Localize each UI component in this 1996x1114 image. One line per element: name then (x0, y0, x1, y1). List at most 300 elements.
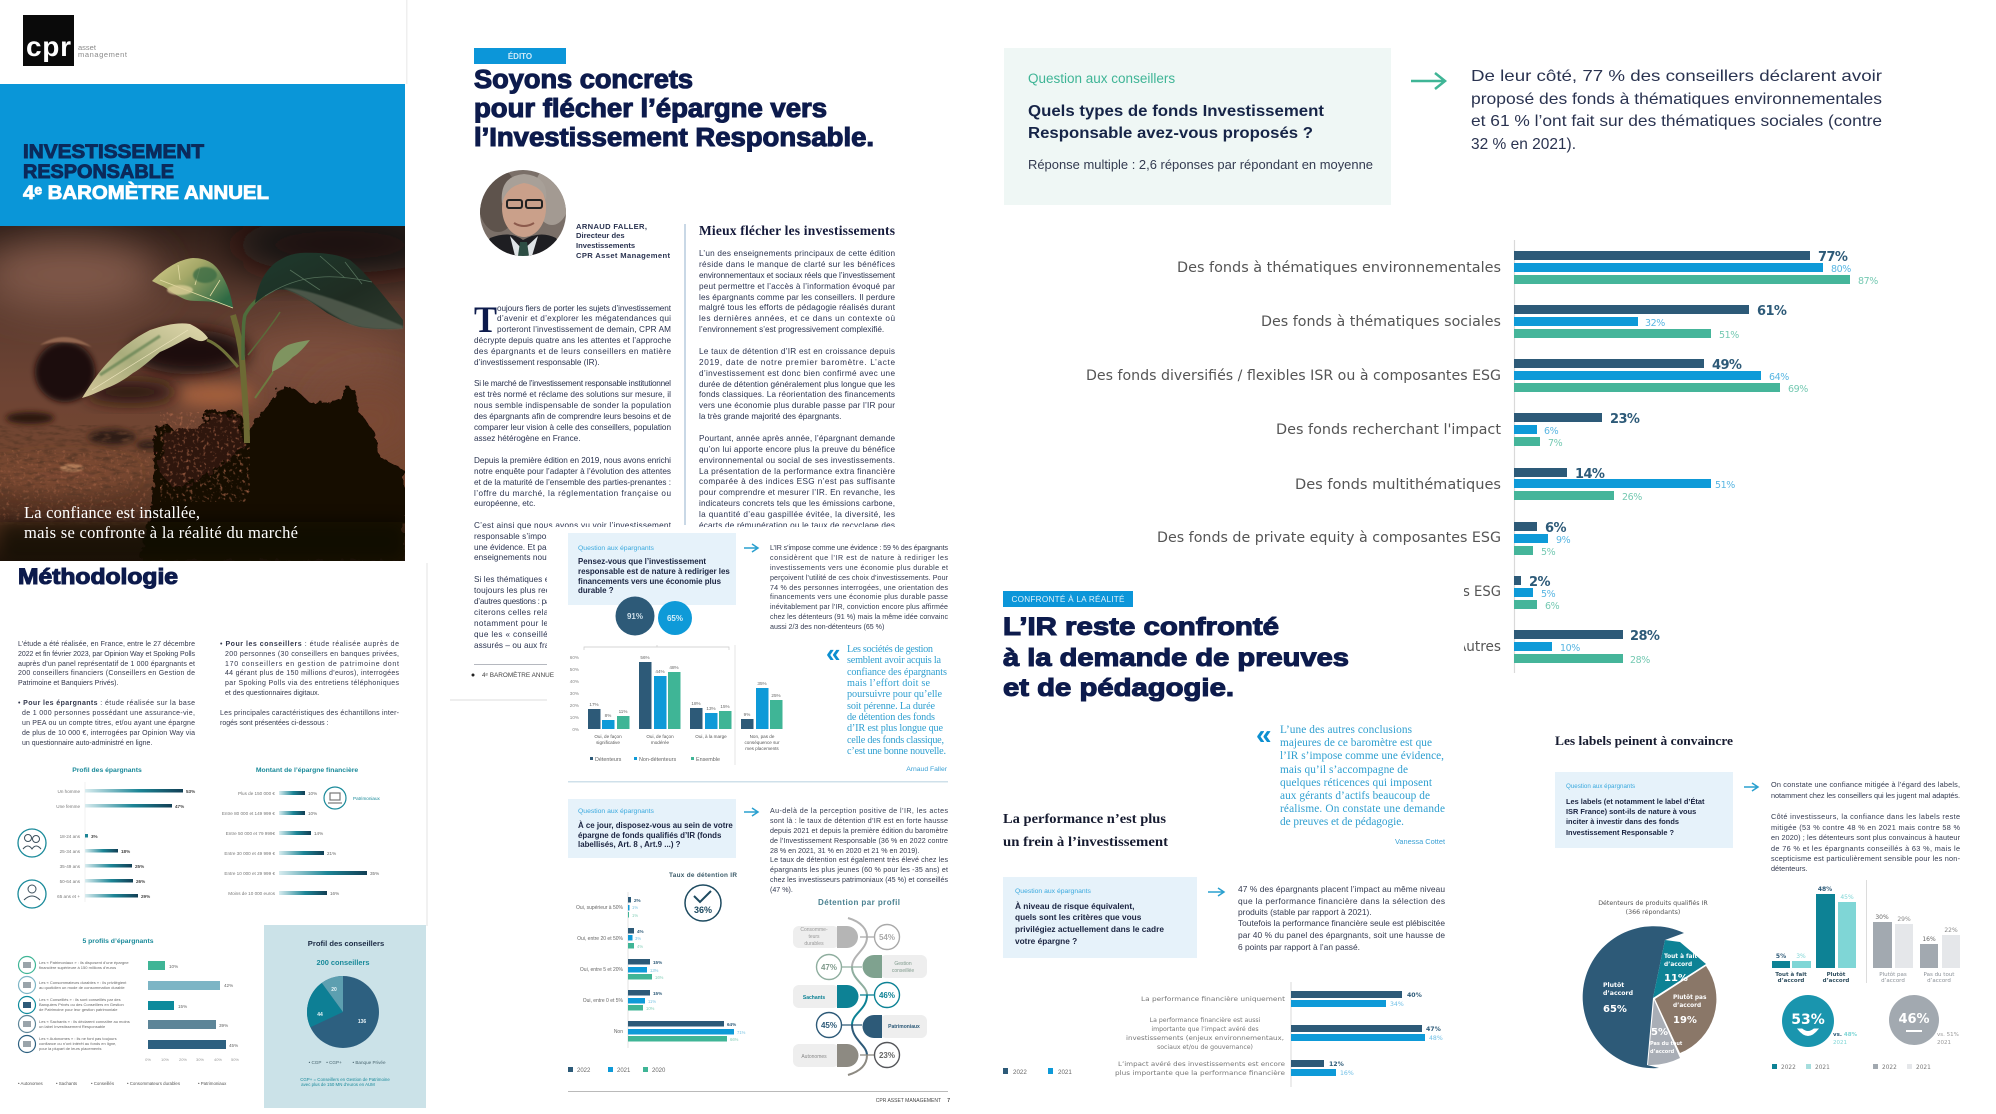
pull quote: Arnaud Faller: c’est une bonne nouvelle. (847, 746, 946, 757)
bar chart: financing opinion: conséquence sur (744, 740, 780, 745)
methodology text, right: 200 personnes (30 conseillers en banques privées, (225, 651, 399, 658)
values 2022: 2% (1529, 575, 1550, 590)
commentary: notamment chez les conseillers qui les jugent mal adaptés. (1771, 791, 1960, 800)
blue title band (0, 84, 405, 226)
legends: years: 2021 (1815, 1065, 1830, 1071)
question box: Question aux épargnants (1015, 888, 1092, 895)
question box: À ce jour, disposez-vous au sein de votre (578, 821, 733, 830)
diagram: detention by profile (793, 918, 927, 1075)
chart: montant de l'épargne financière: 21% (327, 851, 336, 856)
badge: 46% disagree: 2021 (1937, 1040, 1951, 1046)
chart: profil des épargnants: 25% (135, 864, 144, 869)
editorial right column: L’un des enseignements principaux de cette édition (699, 249, 895, 258)
chart: 5 profils d'épargnants: de Patrimoine pour leur gestion patrimoniale (39, 1007, 118, 1012)
diagram: detention by profile: 45% (821, 1021, 837, 1030)
chart: profil des épargnants: 50-64 ans (60, 879, 81, 884)
pie chart: label confidence: d’accord (1664, 962, 1692, 968)
pie chart: label confidence: 5% (1651, 1027, 1668, 1038)
values 2020: 51% (1719, 330, 1739, 341)
bar chart: financing opinion: 0% (572, 727, 579, 732)
pull quote: Arnaud Faller: celle des fonds classique, (847, 735, 944, 746)
bar chart: financing opinion: 25% (771, 693, 781, 698)
bar chart: financing opinion: 8% (605, 713, 611, 718)
commentary text: L’IR s’impose comme une évidence : 59 % des épargnants (770, 544, 948, 552)
bar chart: holdings: 3% (635, 936, 641, 941)
legend: years: 2022 (577, 1068, 591, 1074)
bars 2022 (1514, 251, 1810, 639)
commentary text: depuis 2021 et depuis la première édition du baromètre (770, 827, 948, 835)
soil mound (140, 387, 405, 561)
bar chart: financing opinion: 50% (570, 667, 579, 672)
diagram: detention by profile: durables (804, 941, 824, 947)
editorial left column: Si les thématiques environnementales restent encore (474, 575, 671, 584)
question box: épargne de fonds qualifiés d’IR (fonds (578, 831, 722, 840)
panel: labels (1555, 733, 1961, 1071)
commentary text: chez les détenteurs (91 %) mais la même idée convainc (770, 613, 948, 621)
badge: 53% agree: 53% (1791, 1012, 1825, 1028)
bar chart: performance vs impact: 12% (1329, 1061, 1344, 1068)
editorial right column: la très grande majorité des épargnants. (699, 412, 841, 421)
subheading: performance: un frein à l’investissement (1003, 834, 1169, 849)
legend: conseillers: • Banque Privée (352, 1060, 386, 1065)
author credit: Investissements (576, 241, 635, 250)
editorial left column: européenne, etc. (474, 499, 535, 508)
commentary text: perçoivent l’utilité de ces choix d’investissements. Pour (770, 574, 949, 582)
editorial right column: fonds classiques. La réorientation des financements (699, 390, 895, 399)
legends: years: 2021 (1916, 1065, 1931, 1071)
bar chart: agreement: 29% (1897, 916, 1911, 923)
methodology text, right: rogés sont présentées ci-dessous : (220, 720, 329, 727)
commentary text: chez les investisseurs patrimoniaux (45 %) et conseillés (770, 876, 948, 884)
question box: Question aux épargnants (1566, 783, 1635, 790)
editorial left column: toujours les plus recherchées, nous voyons émerger (474, 586, 671, 595)
chart: 5 profils d'épargnants: Les « Patrimoniaux » : ils disposent d’une épargne (39, 960, 129, 965)
heading: Mieux flécher: Mieux flécher les investissements (699, 223, 895, 238)
chart: montant de l'épargne financière: 16% (330, 891, 339, 896)
badge: 36% check (685, 885, 721, 921)
chart: montant de l'épargne financière: Moins de 10 000 euros (228, 891, 276, 896)
legend: profiles: • Conseillés (91, 1081, 115, 1086)
pie chart: label confidence: Plutôt pas (1673, 994, 1707, 1001)
category labels: Autres (1457, 639, 1501, 655)
editorial left column: Si le marché de l’investissement responsable institutionnel (474, 379, 671, 388)
chart: 5 profils d'épargnants: au quotidien un mode de consommation durable (39, 985, 125, 990)
bar chart: agreement: 3% (1796, 953, 1806, 960)
chart legend (590, 757, 720, 763)
edito footer (450, 664, 554, 701)
commentary text: aussi 2/3 des non-détenteurs (65 %) (770, 623, 884, 631)
values 2020: 5% (1541, 547, 1556, 558)
pull quote: Arnaud Faller: semblent avoir acquis la (847, 655, 941, 666)
question box: Question aux épargnants (578, 545, 655, 552)
subheading: performance: La performance n’est plus (1003, 811, 1166, 826)
commentary: de 76 % et les épargnants conseillés à 63 %, mais le (1771, 844, 1960, 853)
editorial left column: oujours fiers de porter les sujets d’investissement (497, 304, 672, 313)
question box (568, 533, 736, 605)
values 2022 (1529, 250, 1848, 644)
chart: profil des épargnants: 53% (186, 789, 195, 794)
chart: 5 profils d'épargnants: 39% (219, 1023, 228, 1028)
editorial left column: d’autres questions : parmi elles, nous pouvons notamment (474, 597, 672, 606)
chart: montant de l'épargne financière: Plus de 150 000 € (238, 791, 275, 796)
question box: responsable est de nature à rediriger les (578, 567, 730, 576)
bar chart: agreement: Plutôt pas (1879, 971, 1907, 978)
methodology text, left: un PEA ou un compte titres, et/ou ayant une épargne (22, 720, 195, 727)
bar chart: holdings: Oui, entre 20 et 50% (577, 936, 624, 942)
chart: montant de l'épargne financière: 10% (308, 791, 317, 796)
stem (233, 315, 247, 443)
diagram: detention by profile: Gestion (894, 961, 912, 967)
bar chart: agreement: 16% (1922, 936, 1936, 943)
editorial left column: et de la maturité de l’ensemble des parties-prenantes : (474, 478, 671, 487)
editorial right column: Le taux de détention d’IR est en croissance depuis (699, 347, 895, 356)
bar chart: performance vs impact: La performance financière uniquement (1141, 995, 1286, 1003)
cover title: 4ᵉ BAROMÈTRE ANNUEL (23, 182, 269, 204)
chart: 5 profils d'épargnants: confiance ou n’ont intérêt au fonds en ligne, (39, 1041, 116, 1046)
values 2022: 61% (1757, 304, 1787, 319)
heading: détention par profil: Détention par profil (818, 898, 900, 907)
bar chart: holdings: 15% (653, 960, 662, 965)
methodology text, right: 170 conseillers en gestion de patrimoine dont (225, 661, 399, 668)
methodology text, right: et des questionnaires digitaux. (225, 690, 320, 697)
bar chart: holdings: 15% (653, 991, 662, 996)
editorial left column (474, 304, 672, 650)
bar chart: agreement: Pas du tout (1924, 972, 1955, 978)
methodology text, right: • Pour les conseillers : étude réalisée auprès de (220, 641, 399, 648)
arrow (1411, 73, 1445, 89)
question box: financements vers une économie plus (578, 577, 722, 586)
pull quote: Arnaud Faller: confiance des épargnants (847, 667, 947, 678)
pull quote: Arnaud Faller: « (826, 638, 840, 668)
legends: years (1772, 1064, 1931, 1071)
cover title: RESPONSABLE (23, 162, 174, 183)
values 2021: 6% (1544, 426, 1559, 437)
column divider (684, 224, 686, 525)
values 2020: 7% (1548, 438, 1563, 449)
bar chart: holdings: 16% (655, 975, 664, 980)
pull quote: Vanessa Cottet: l’IR s’impose comme une évidence, (1280, 750, 1444, 762)
commentary: scepticisme est particulièrement sensible pour les non- (1771, 854, 1961, 863)
panel: survey question, holdings (568, 799, 950, 1104)
methodology text, left: L’étude a été réalisée, en France, entre le 27 décembre (18, 641, 195, 648)
commentary (1238, 884, 1445, 952)
bar chart: holdings: 1% (632, 905, 638, 910)
stat circles (616, 596, 692, 636)
editorial right column: l’environnement s’est progressivement complexifié. (699, 325, 884, 334)
editorial right column: réside dans le manque de clarté sur les bénéfices (699, 260, 895, 269)
stat circles: 65% (667, 614, 683, 623)
author credit (576, 222, 670, 260)
bar chart: holdings (576, 892, 746, 1048)
question box: durable ? (578, 586, 614, 595)
legend: profiles: • Patrimoniaux (198, 1081, 227, 1086)
chart: profil des épargnants: 18% (121, 849, 130, 854)
values 2021 (1541, 264, 1851, 654)
pull quote: Vanessa Cottet: L’une des autres conclusions (1280, 724, 1412, 736)
editorial left column: responsable s’impose encore davantage comme une (474, 532, 671, 541)
commentary: Côté investisseurs, la confiance dans les labels reste (1771, 812, 1960, 821)
note: avec plus de 150 MN d’euros en AUM (301, 1082, 375, 1087)
author credit: CPR Asset Management (576, 251, 670, 260)
pie chart: conseillers (307, 976, 379, 1048)
editorial left column: C’est ainsi que nous avons vu voir l’investissement (474, 521, 672, 530)
commentary text: considèrent que l’IR est de nature à rediriger les (770, 554, 948, 562)
question box: labellisés, Art. 8 , Art.9 ...) ? (578, 840, 681, 849)
chart: profil des épargnants: 18-24 ans (60, 834, 81, 839)
commentary text: investissements vers une économie plus durable et (770, 564, 948, 572)
values 2022: 49% (1712, 358, 1742, 373)
chart: fund types offered (1086, 240, 1878, 673)
question box: Question aux conseillers (1028, 71, 1175, 86)
bar chart: financing opinion: Oui, à la marge (695, 734, 727, 739)
values 2021: 80% (1831, 264, 1851, 275)
badge: 46% disagree: 46% (1898, 1012, 1930, 1027)
question box: quels sont les critères que vous (1015, 912, 1142, 922)
bar chart: financing opinion: 17% (589, 702, 599, 707)
editorial left column: l’offre du marché, la réglementation française ou (474, 489, 671, 498)
question box (1555, 772, 1733, 848)
values 2022: 28% (1630, 629, 1660, 644)
methodology text, left: 2022 et fin février 2023, par Opinion Way et Spoking Polls (18, 651, 196, 658)
editorial left column: citerons celles relatives à la diversité et au social, (474, 608, 671, 617)
values 2020: 87% (1858, 276, 1878, 287)
bar chart: holdings: 71% (737, 1030, 746, 1035)
editorial left column: d’avenir et d’explorer les mégatendances qui (497, 314, 671, 323)
values 2021: 51% (1715, 480, 1735, 491)
values 2021: 64% (1769, 372, 1789, 383)
chart: 5 profils d'épargnants: financière supérieure à 150 millions d’euros (39, 965, 116, 970)
pie chart: label confidence: d’accord (1650, 1049, 1675, 1055)
cover photo: seedling in soil (0, 226, 405, 561)
category labels: Des fonds de private equity à composantes ESG (1157, 530, 1501, 546)
editorial right column: les épargnants comme par les conseillers. Il perdure (699, 293, 895, 302)
pull quote: Vanessa Cottet: quelques réticences qui imposent (1280, 777, 1433, 789)
commentary text: Le taux de détention est également très élevé chez les (770, 856, 948, 864)
overlapping page backdrop (547, 527, 987, 1114)
diagram: detention by profile: Patrimoniaux (888, 1024, 920, 1030)
editorial left column: notre enquête pour l’adapter à l’évolution des attentes (474, 467, 671, 476)
chart: profil des épargnants: Une femme (56, 804, 80, 809)
pull quote: Vanessa Cottet: de preuves et de pédagogie. (1280, 816, 1404, 828)
bar chart: performance vs impact (1115, 982, 1443, 1087)
chart: profil des épargnants: 47% (175, 804, 184, 809)
legend: conseillers: • CGP+ (326, 1060, 342, 1065)
bar chart: holdings: Oui, supérieur à 50% (576, 905, 624, 911)
commentary: que la performance financière dans la sélection des (1238, 896, 1445, 906)
chart: montant de l'épargne financière: Entre 10 000 et 29 999 € (224, 871, 275, 876)
values 2022: 6% (1545, 521, 1566, 536)
drop cap: T (474, 300, 497, 341)
title: et de pédagogie. (1003, 674, 1234, 702)
cover tagline: mais se confronte à la réalité du marché (24, 523, 298, 542)
chart: profil des épargnants: 29% (141, 894, 150, 899)
portrait of Arnaud Faller (480, 170, 566, 256)
legend: years: 2022 (1013, 1069, 1027, 1076)
category labels: Des fonds à thématiques environnementales (1177, 260, 1501, 276)
question box (568, 799, 736, 858)
methodology text, right: par Spoking Polls via des entretiens téléphoniques (225, 680, 400, 687)
commentary: Toutefois la performance financière seule est plébiscitée (1238, 918, 1445, 928)
arrow (744, 544, 758, 552)
badge: 46% disagree (1889, 995, 1959, 1046)
methodology text, left: de 1 000 personnes possédant une assurance-vie, (22, 710, 195, 717)
methodology text, left: un questionnaire auto-administré en ligne. (22, 740, 152, 747)
bar chart: holdings: Oui, entre 5 et 20% (580, 967, 624, 973)
leaf upper-right (255, 253, 403, 329)
pull quote: Arnaud Faller: mais l’effort doit se (847, 678, 930, 689)
bar chart: holdings: 4% (637, 944, 643, 949)
chart: 5 profils d'épargnants: 10% (169, 964, 178, 969)
question box: Quels types de fonds Investissement (1028, 103, 1325, 120)
pie chart: conseillers: 136 (358, 1019, 366, 1025)
logo: asset (78, 43, 97, 52)
chart legend: Ensemble (696, 757, 720, 763)
question box: inciter à investir dans des fonds (1566, 817, 1679, 826)
leaf left drooping (82, 323, 208, 398)
editorial right column: écarts de rémunération ou le taux de recyclage des (699, 521, 895, 530)
pie chart: label confidence: 19% (1673, 1015, 1697, 1026)
commentary: On constate une confiance mitigée à l’égard des labels, (1771, 780, 1960, 789)
commentary text: sont là : le taux de détention d’IR est en forte hausse (770, 817, 948, 825)
values 2022: 14% (1575, 467, 1605, 482)
panel: profil des conseillers: 200 conseillers (316, 958, 370, 967)
editorial right column: environnemental ou social de ses investissements. (699, 456, 895, 465)
category labels (1086, 260, 1502, 655)
commentary: en 2020) ; les détenteurs sont plus convaincus à hauteur (1771, 833, 1961, 842)
heading: taux de détention: Taux de détention IR (669, 872, 737, 879)
chart: profil des épargnants: 26% (136, 879, 145, 884)
chart legend: Détenteurs (595, 757, 622, 763)
pull quote: Vanessa Cottet: aux gérants d’actifs beaucoup de (1280, 790, 1430, 802)
chart: 5 profils d'épargnants: 40% (214, 1057, 222, 1062)
edito footer: 4ᵉ BAROMÈTRE ANNUE (482, 670, 554, 679)
legend: years (1003, 1068, 1072, 1076)
bar chart: holdings: 1% (632, 913, 638, 918)
methodology text, right: 44 gérant plus de 150 millions d’euros), interrogées (225, 670, 400, 677)
chart: montant de l'épargne financière: 10% (308, 811, 317, 816)
editorial right column: malgré tous les efforts de pédagogie réalisés durant (699, 303, 896, 312)
commentary text: (47 %). (770, 886, 793, 894)
bar chart: performance vs impact: investissements (enjeux environnementaux, (1126, 1035, 1284, 1042)
editorial left column: enseignements nouveaux de cette édition s’affirment. (474, 553, 671, 562)
page footer: 7 (947, 1098, 950, 1104)
edito title: l’Investissement Responsable. (474, 124, 874, 152)
panel: cover (0, 0, 450, 561)
diagram: detention by profile: 23% (879, 1051, 895, 1060)
editorial left column: des épargnants et de leurs conseillers en matière (474, 347, 671, 356)
pull quote: Vanessa Cottet: Vanessa Cottet (1395, 837, 1445, 846)
page footer: CPR ASSET MANAGEMENT (876, 1098, 941, 1104)
badge: 53% agree (1782, 995, 1858, 1047)
chart: montant de l'épargne financière: Montant de l’épargne financière (256, 767, 358, 774)
diagram: detention by profile: Autonomes (801, 1054, 827, 1060)
bar chart: agreement: 30% (1875, 914, 1889, 921)
methodology text, left: • Pour les épargnants : étude réalisée sur la base (18, 700, 195, 707)
values 2020: 6% (1545, 601, 1560, 612)
bar chart: holdings: Oui, entre 0 et 5% (583, 998, 624, 1004)
editorial left column: porteront l’investissement de demain, CPR AM (497, 325, 671, 334)
pie chart: conseillers: 44 (317, 1012, 323, 1018)
chart: 5 profils d'épargnants: un label Investissement Responsable (39, 1024, 106, 1029)
edito title: pour flécher l’épargne vers (474, 95, 827, 123)
question box (1003, 877, 1197, 958)
page footer (568, 1091, 950, 1104)
values 2021: 5% (1541, 589, 1556, 600)
commentary text: de l’Investissement Responsable (36 % en 2022 contre (770, 837, 948, 845)
legend: profiles (18, 1081, 227, 1086)
bar chart: financing opinion (570, 645, 782, 765)
editorial right column: la quantité d’eau gaspillée évitée, la diversité, les (699, 510, 895, 519)
question box: Réponse multiple : 2,6 réponses par répondant en moyenne (1028, 157, 1373, 172)
panel: confronté à la réalité (1003, 591, 1445, 1087)
bar chart: financing opinion: 13% (706, 706, 716, 711)
chart: profil des épargnants: 35-49 ans (60, 864, 81, 869)
diagram: detention by profile: Sachants (803, 995, 825, 1001)
chart: 5 profils d'épargnants: Les « Conseillés » : ils sont conseillés par des (39, 997, 121, 1002)
note (300, 1077, 390, 1087)
bar chart: agreement: 22% (1944, 927, 1958, 934)
commentary (1471, 68, 1883, 153)
pie chart: label confidence: d’accord (1603, 990, 1633, 997)
commentary: par 40 % du panel des épargnants, soit une hausse de (1238, 930, 1445, 940)
overlapping page backdrop (987, 578, 1464, 698)
legends: years: 2022 (1781, 1065, 1796, 1071)
editorial left column: assurés – ou aux frais de gestion des différents fonds (474, 641, 671, 650)
editorial right column: indicateurs concrets tels que les émissions carbone, (699, 499, 895, 508)
commentary text: Au-delà de la perception positive de l’IR, les actes (770, 807, 948, 815)
pull quote: Arnaud Faller: d’IR est plus longue que (847, 723, 943, 734)
panel: profil des conseillers (264, 925, 426, 1108)
badge: 36% check: 36% (694, 905, 712, 915)
pie heading (1598, 899, 1708, 916)
bar chart: financing opinion: 30% (570, 691, 579, 696)
bar chart: performance vs impact: 16% (1340, 1070, 1354, 1077)
bar chart: performance vs impact: importante que l’impact avéré des (1151, 1025, 1259, 1033)
pull quote: Arnaud Faller: de détention des fonds (847, 712, 935, 723)
commentary: 47 % des épargnants placent l’impact au même niveau (1238, 884, 1445, 894)
bar chart: agreement: d’accord (1927, 978, 1951, 984)
methodology text, left (18, 641, 196, 747)
bar chart: agreement: 5% (1776, 953, 1786, 960)
badge: 53% agree: 2021 (1833, 1040, 1847, 1046)
pull quote: Arnaud Faller (826, 638, 948, 773)
question box: Investissement Responsable ? (1566, 828, 1675, 837)
chart: profil des épargnants: 65 ans et + (57, 894, 80, 899)
commentary: et 61 % l’ont fait sur des thématiques sociales (contre (1471, 113, 1882, 130)
legend: years: 2021 (617, 1068, 631, 1074)
bar chart: financing opinion: 18% (691, 701, 701, 706)
editorial right column: 2019, date de notre premier baromètre. L’acte (699, 358, 895, 367)
bar chart: financing opinion: 10% (570, 715, 579, 720)
editorial left column: nous semble indispensable de sonder la population (474, 401, 671, 410)
values 2020: 26% (1622, 492, 1642, 503)
bar chart: performance vs impact: plus importante que la performance financière (1115, 1069, 1285, 1077)
pull quote: Vanessa Cottet (1256, 719, 1445, 846)
values 2021: 10% (1560, 643, 1580, 654)
chart: profil des épargnants: Profil des épargnants (72, 767, 142, 774)
editorial left column: notamment pour les portefeuilles, ainsi que celles (474, 619, 671, 628)
bar chart: financing opinion: Oui, de façon (646, 734, 674, 739)
panel: survey question, redirect financing (568, 533, 949, 782)
question box: votre épargne ? (1015, 936, 1077, 946)
editorial right column (699, 249, 896, 530)
chart: profil des épargnants: Un homme (58, 789, 80, 794)
icon: patrimoniaux (324, 787, 346, 809)
leaf upper-left (152, 258, 233, 308)
editorial right column: durée de détention généralement plus longue que les (699, 380, 895, 389)
commentary text: financements vers une économie plus durable passe (770, 593, 948, 601)
editorial left column: décrypte depuis quatre ans les attentes et l’approche (474, 336, 671, 345)
